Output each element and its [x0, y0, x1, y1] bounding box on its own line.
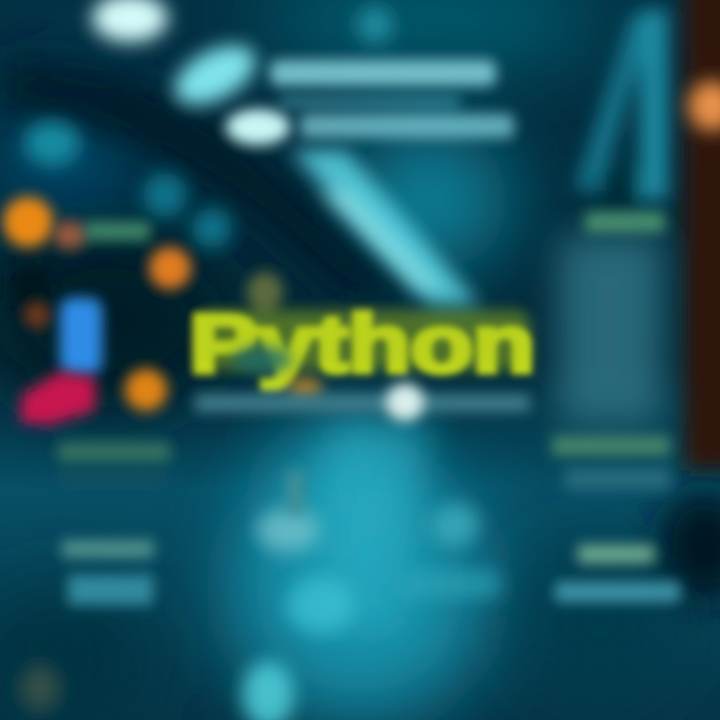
heading line two — [280, 96, 460, 108]
orange circle large — [3, 197, 53, 247]
orange circle bottom — [125, 369, 167, 411]
subtitle — [195, 383, 530, 421]
orange circle right — [149, 247, 191, 289]
blue bar — [60, 298, 102, 374]
right lower detail — [555, 582, 680, 602]
subtitle bar — [195, 394, 530, 412]
light beam — [290, 150, 480, 305]
title orange accent — [287, 377, 323, 399]
lower glow — [286, 577, 354, 633]
lower figure right — [431, 503, 479, 547]
top circle — [357, 7, 393, 43]
lower text glow — [400, 570, 500, 598]
reddish link — [53, 221, 87, 249]
title centre shade — [232, 346, 292, 374]
lower centre shapes — [242, 470, 500, 720]
left detail two — [68, 575, 153, 605]
dark orange dot — [24, 302, 50, 328]
left label two — [62, 540, 154, 558]
title word: Python — [190, 299, 535, 390]
right panel diagonal rays — [575, 10, 668, 215]
heading line one — [270, 60, 496, 86]
right panel detail — [565, 468, 670, 490]
title figure — [247, 272, 283, 312]
lower centre streak — [320, 420, 430, 630]
beam core — [320, 190, 440, 290]
bottom left brown spot — [20, 664, 60, 712]
left icons cluster — [3, 197, 191, 425]
heading icon upper — [165, 33, 265, 117]
right lower shadow — [660, 490, 720, 600]
left detail one — [62, 472, 162, 486]
small blobs — [143, 173, 232, 248]
right panel — [552, 212, 680, 602]
subtitle bright spot — [386, 383, 424, 421]
left labels — [58, 442, 170, 605]
main title — [190, 272, 535, 399]
black patch — [10, 265, 50, 305]
lower figure stem — [286, 470, 304, 515]
right lower label — [578, 545, 654, 563]
right dark column — [684, 0, 720, 470]
bottom glow — [242, 661, 294, 720]
magenta shape — [20, 372, 95, 425]
right panel header — [585, 212, 665, 232]
heading icon lower — [226, 109, 290, 145]
right panel body — [558, 235, 663, 425]
top glow — [92, 0, 168, 42]
heading line three — [300, 114, 514, 138]
orange spot — [688, 81, 720, 131]
heading block — [165, 33, 514, 145]
right panel caption — [552, 436, 670, 456]
lower figure left — [256, 508, 320, 552]
title glow — [195, 310, 530, 370]
left blob — [24, 121, 80, 165]
green label — [85, 222, 150, 240]
dark diagonal band — [0, 58, 420, 305]
left label one — [58, 442, 170, 462]
